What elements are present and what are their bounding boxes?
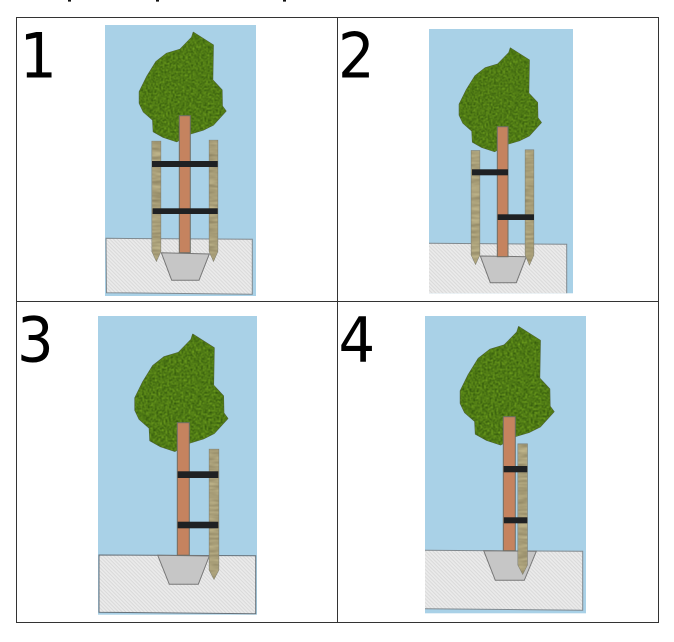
panel 2: two stakes, each tie to one stake bbox=[338, 21, 573, 293]
ground 4 bbox=[425, 550, 583, 610]
tree crown 4 bbox=[460, 327, 554, 445]
left stake 2 bbox=[471, 151, 480, 264]
stake 3 bbox=[209, 449, 219, 579]
ground 3 bbox=[99, 555, 256, 614]
clipped caption text remnants bbox=[68, 0, 286, 2]
right stake 2 bbox=[525, 150, 534, 265]
sky background 2 bbox=[429, 29, 573, 293]
tree crown 2 bbox=[459, 48, 541, 152]
trunk 3 bbox=[177, 423, 189, 555]
stake 4 bbox=[518, 444, 527, 574]
ground 2 bbox=[429, 243, 567, 293]
panel 3: one stake outside the root ball bbox=[17, 305, 257, 615]
upper tie 1 bbox=[152, 161, 218, 167]
number 4: 4 bbox=[338, 305, 375, 377]
panel 1: tree with two stakes, ties on both stakes bbox=[20, 21, 256, 296]
root ball 1 bbox=[161, 253, 209, 280]
upper tie 3 bbox=[178, 471, 218, 478]
tree crown 1 bbox=[139, 32, 226, 142]
sky background 4 bbox=[425, 316, 586, 613]
number 1: 1 bbox=[20, 21, 57, 93]
trunk 2 bbox=[497, 127, 508, 257]
lower tie 4 bbox=[504, 517, 527, 523]
number 3: 3 bbox=[17, 305, 54, 377]
tree crown 3 bbox=[135, 334, 228, 451]
upper tie 2 bbox=[472, 169, 508, 175]
ground 1 bbox=[106, 238, 252, 294]
lower tie 1 bbox=[153, 208, 218, 214]
right stake 1 bbox=[209, 140, 218, 261]
trunk 4 bbox=[503, 417, 515, 551]
left stake 1 bbox=[152, 141, 161, 261]
sky background 3 bbox=[98, 316, 257, 615]
lower tie 3 bbox=[178, 522, 218, 528]
root ball 2 bbox=[480, 256, 526, 283]
number 2: 2 bbox=[338, 21, 375, 93]
sky background 1 bbox=[105, 25, 256, 296]
root ball 4 bbox=[484, 551, 536, 580]
panel 4: one stake through the root ball bbox=[338, 305, 586, 613]
upper tie 4 bbox=[504, 466, 527, 472]
trunk 1 bbox=[179, 116, 190, 253]
root ball 3 bbox=[158, 555, 209, 584]
lower tie 2 bbox=[498, 214, 534, 220]
